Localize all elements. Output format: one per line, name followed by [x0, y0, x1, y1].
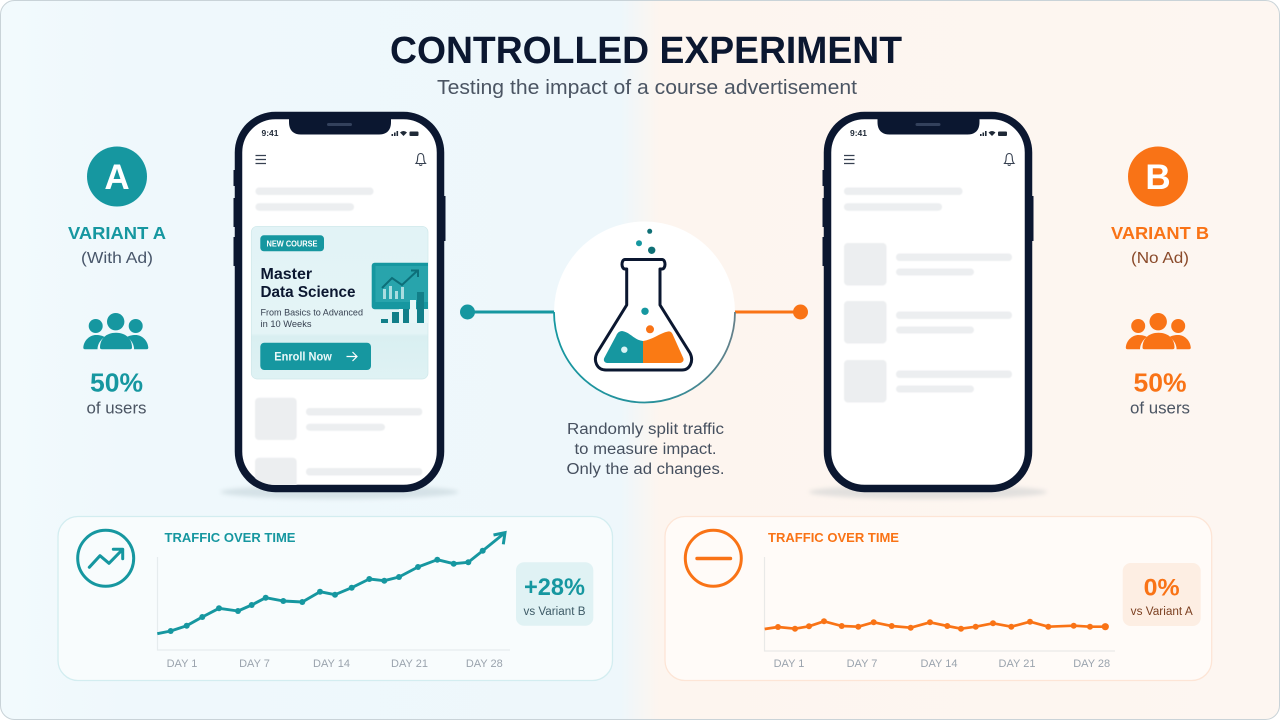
connector: orange to flask — [734, 304, 808, 320]
chart B x-axis labels: DAY 14 — [921, 658, 957, 670]
icon: flat minus — [685, 530, 741, 586]
phone A skeleton text — [256, 188, 374, 211]
variant A description: (With Ad) — [81, 250, 153, 267]
badge A: A — [104, 158, 130, 197]
chart A x-axis labels: DAY 7 — [239, 658, 270, 670]
phone B buttons — [822, 170, 1034, 266]
flask outline — [595, 260, 692, 370]
chart A card — [58, 516, 612, 680]
phone A skeleton list — [254, 398, 422, 485]
stat card: plus 28 percent — [516, 562, 593, 626]
stat card: 0 percent: vs Variant A — [1131, 606, 1193, 618]
chart B line — [765, 618, 1109, 632]
phone B shadow — [809, 485, 1047, 499]
phone B body — [828, 116, 1028, 488]
subtitle: Testing the impact of a course advertisement — [437, 77, 857, 99]
chart A line — [157, 533, 505, 634]
emblem arc — [554, 312, 735, 403]
flask liquid teal — [604, 331, 643, 363]
variant B label: VARIANT B — [1111, 223, 1209, 243]
chart B card — [665, 516, 1212, 680]
caption: of users A: of users — [86, 400, 146, 418]
banner badge: NEW COURSE — [266, 239, 318, 248]
chart B x-axis labels: DAY 7 — [847, 658, 877, 670]
phone B notch — [878, 118, 980, 134]
central flask emblem — [554, 222, 735, 403]
banner button — [260, 343, 371, 370]
banner background — [251, 226, 428, 379]
badge A — [87, 146, 147, 206]
stat: 50 percent A: 50% — [90, 368, 143, 398]
flask liquid orange — [643, 331, 684, 363]
chart A heading: TRAFFIC OVER TIME — [164, 530, 296, 545]
chart B x-axis labels: DAY 28 — [1073, 658, 1110, 670]
stat card: plus 28 percent: vs Variant B — [524, 606, 586, 618]
chart A x-axis labels — [167, 658, 503, 670]
chart B x-axis labels: DAY 21 — [999, 658, 1035, 670]
panel: variant A summary — [68, 146, 166, 418]
phone A bell icon — [416, 154, 426, 166]
icon: trending up — [78, 530, 134, 586]
banner button: Enroll Now — [274, 352, 332, 364]
center explanation text: Only the ad changes. — [566, 461, 724, 478]
phone B menu icon — [844, 156, 854, 164]
panel: traffic chart B — [665, 516, 1212, 680]
stat: 50 percent B: 50% — [1134, 368, 1186, 398]
chart A x-axis labels: DAY 1 — [167, 658, 197, 670]
banner badge — [260, 235, 324, 251]
stat card: plus 28 percent: +28% — [524, 574, 585, 601]
panel: traffic chart A — [58, 516, 612, 680]
banner description: From Basics to Advanced — [260, 307, 363, 317]
banner description: in 10 Weeks — [260, 319, 312, 329]
phone B status icons — [980, 131, 1007, 136]
badge B: B — [1145, 158, 1171, 197]
phone B clock: 9:41 — [850, 128, 867, 138]
variant B description: (No Ad) — [1131, 250, 1189, 267]
phone B skeleton list — [844, 243, 1012, 402]
chart A x-axis labels: DAY 28 — [466, 658, 503, 670]
phone A notch — [289, 118, 391, 134]
phone A status icons — [392, 131, 418, 136]
phone A menu icon — [256, 156, 266, 164]
stat card: 0 percent — [1123, 563, 1201, 626]
stat card: 0 percent: 0% — [1144, 574, 1180, 602]
phone A shadow — [220, 485, 458, 499]
chart B x-axis labels: DAY 1 — [774, 658, 804, 670]
chart A x-axis labels: DAY 21 — [391, 658, 428, 670]
chart A x-axis labels: DAY 14 — [313, 658, 350, 670]
chart B axes — [764, 557, 1115, 651]
badge B — [1128, 146, 1188, 206]
flask bubbles — [621, 229, 655, 353]
phone A body — [238, 116, 440, 488]
phone A with ad — [220, 116, 458, 500]
center explanation text: to measure impact. — [574, 441, 716, 458]
connector: teal to flask — [460, 304, 554, 320]
variant A label: VARIANT A — [68, 223, 166, 243]
phone A clock: 9:41 — [262, 128, 279, 138]
caption: of users B: of users — [1130, 400, 1190, 418]
phone B skeleton text — [844, 188, 962, 211]
phone B without ad — [809, 116, 1047, 499]
icon: users B — [1126, 313, 1191, 349]
title: CONTROLLED EXPERIMENT — [390, 30, 902, 72]
illustration: data monitor — [372, 263, 432, 323]
phone B bell icon — [1004, 154, 1014, 166]
chart B x-axis labels — [774, 658, 1110, 670]
advertisement banner — [251, 226, 432, 379]
banner headline: Master — [260, 266, 312, 283]
chart A axes — [158, 557, 510, 650]
center explanation text: Randomly split traffic — [567, 421, 724, 438]
chart B heading: TRAFFIC OVER TIME — [768, 530, 899, 545]
banner headline: Data Science — [260, 284, 356, 301]
panel: variant B summary — [1111, 146, 1209, 418]
icon: users A — [83, 313, 148, 349]
emblem circle — [554, 222, 735, 402]
phone A buttons — [234, 170, 446, 266]
